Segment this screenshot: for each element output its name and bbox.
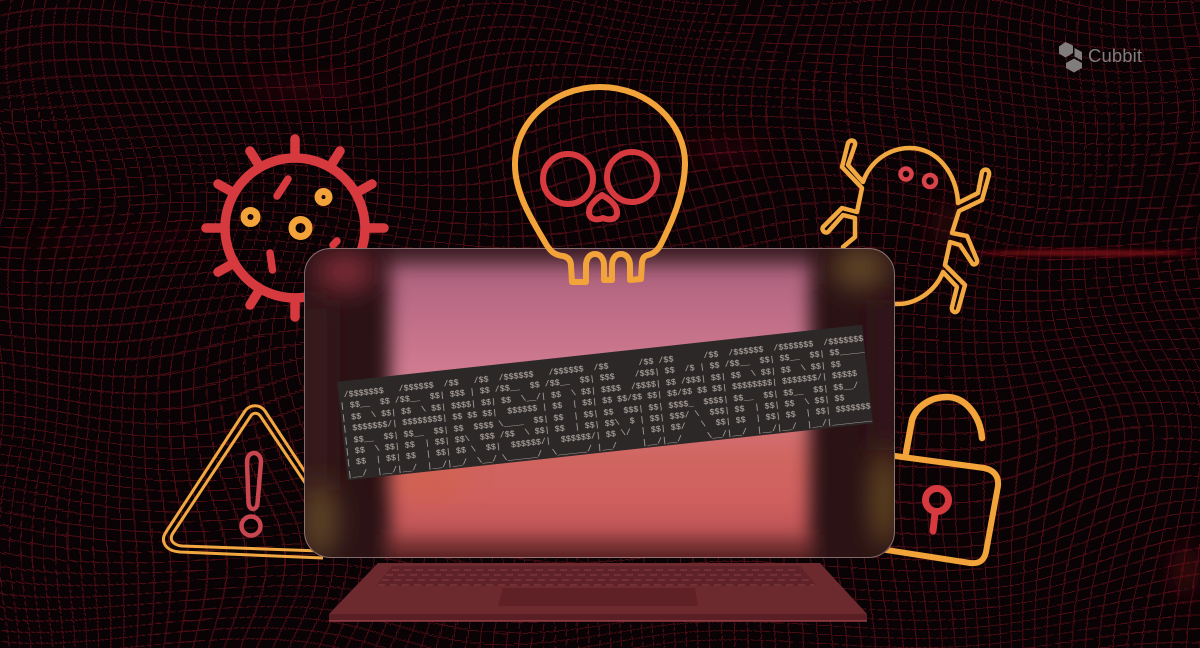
trackpad bbox=[498, 588, 698, 606]
logo: Cubbit bbox=[1059, 42, 1142, 72]
logo: Cubbit: Cubbit bbox=[1088, 45, 1142, 66]
panel: frosted glass laptop screen bbox=[304, 248, 895, 558]
ascii art banner: RANSOMWARE: /$$$$$$$ /$$$$$$ /$$ /$$ /$$$$$$ /$$$$$$ /$$ /$$ /$$ /$$ /$$$$$$ /$$$$$$$ /$$$$$$$$ | $$__ $$ /$$__ $$| $$$ | $$ /$$__ $$ /$$__ $$| $$$ /$$$| $$ /$ | $$ /$$__ $$| $$__ $$| $$_____/ | $$ \ $$| $$ \ $$| $$$$| $$| $$ \__/| $$ \ $$| $$$$ /$$$$| $$ /$$$| $$| $$ \ $$| $$ \ $$| $$ | $$$$$$$/| $$$$$$$$| $$ $$ $$| $$$$$$ | $$ | $$| $$ $$/$$ $$| $$/$$ $$ $$| $$$$$$$$| $$$$$$$/| $$$$$ | $$__ $$| $$__ $$| $$ $$$$ \____ $$| $$ | $$| $$ $$$| $$| $$$$_ $$$$| $$__ $$| $$__ $$| $$__/ | $$ \ $$| $$ | $$| $$\ $$$ /$$ \ $$| $$ | $$| $$\ $ | $$| $$$/ \ $$$| $$ | $$| $$ \ $$| $$ | $$ | $$| $$ | $$| $$ \ $$| $$$$$$/| $$$$$$/| $$ \/ | $$| $$/ \ $$| $$ | $$| $$ | $$| $$$$$$$$ |__/ |__/|__/ |__/|__/ \__/ \______/ \______/ |__/ |__/|__/ \__/|__/ |__/|__/ |__/|________/ bbox=[339, 333, 873, 480]
keys area bbox=[376, 566, 817, 586]
